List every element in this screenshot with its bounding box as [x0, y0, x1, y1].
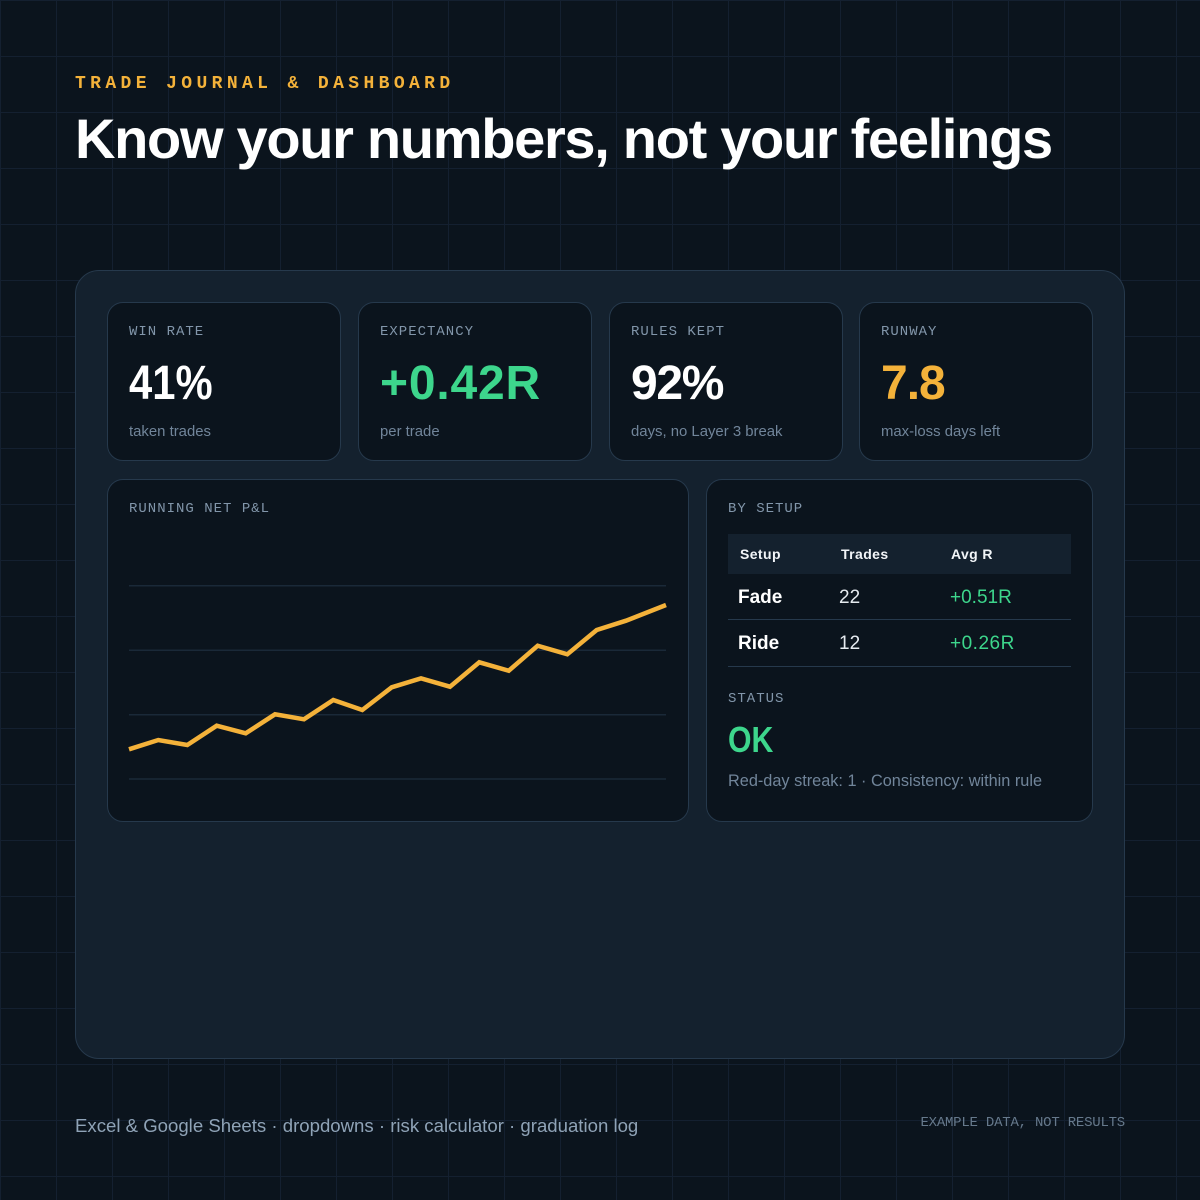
card: runway: 7.8 [881, 357, 945, 410]
card: runway [859, 302, 1093, 461]
card: win rate [107, 302, 341, 461]
row: ride: 12 [839, 633, 860, 654]
eyebrow: TRADE JOURNAL & DASHBOARD [75, 74, 455, 94]
row: fade: Fade [738, 587, 782, 608]
status label: STATUS [728, 691, 784, 707]
card: win rate: 41% [129, 357, 213, 410]
row: fade: +0.51R [950, 587, 1012, 608]
panel: dashboard [75, 270, 1125, 1059]
card: expectancy: per trade [380, 424, 440, 440]
card: expectancy: EXPECTANCY [380, 324, 474, 340]
row: ride [728, 620, 1071, 667]
panel: by setup [706, 479, 1093, 822]
header: setup: Setup [740, 546, 781, 562]
card: rules kept: days, no Layer 3 break [631, 424, 782, 440]
row: ride: Ride [738, 633, 779, 654]
row: ride: +0.26R [950, 633, 1015, 654]
panel: running net P&L: RUNNING NET P&L [129, 501, 270, 517]
card: win rate: taken trades [129, 424, 211, 440]
card: expectancy [358, 302, 592, 461]
footer right: EXAMPLE DATA, NOT RESULTS [920, 1115, 1125, 1131]
status note: Red-day streak: 1 · Consistency: within rule [728, 772, 1042, 790]
title: Know your numbers, not your feelings [75, 107, 1052, 170]
card: expectancy: +0.42R [380, 357, 541, 410]
card: win rate: WIN RATE [129, 324, 204, 340]
header: avg r: Avg R [951, 546, 993, 562]
row: fade [728, 574, 1071, 620]
footer left: Excel & Google Sheets · dropdowns · risk calculator · graduation log [75, 1115, 638, 1136]
card: rules kept: RULES KEPT [631, 324, 725, 340]
status value: OK [728, 719, 773, 760]
by setup label: BY SETUP [728, 501, 803, 517]
card: rules kept: 92% [631, 357, 723, 410]
panel: running net P&L [107, 479, 689, 822]
header: trades: Trades [841, 546, 889, 562]
row: fade: 22 [839, 587, 860, 608]
card: runway: RUNWAY [881, 324, 937, 340]
card: runway: max-loss days left [881, 424, 1000, 440]
card: rules kept [609, 302, 843, 461]
table header [728, 534, 1071, 574]
